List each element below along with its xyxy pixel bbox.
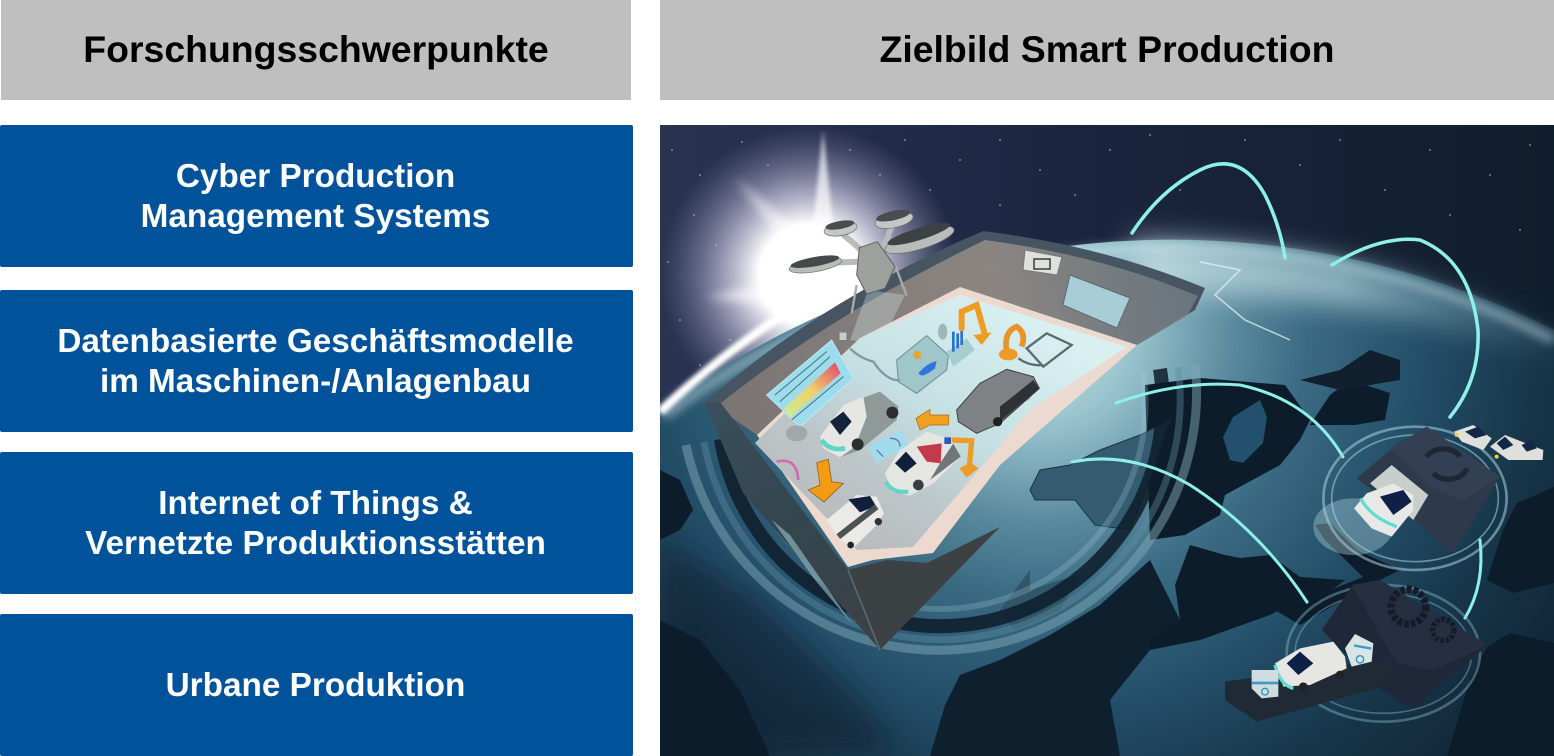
arms (817, 222, 913, 263)
legs (852, 265, 907, 313)
heading: Forschungsschwerpunkte: Forschungsschwerpunkte (83, 28, 549, 70)
panel: Internet of Things: Vernetzte Produktionsstätten (85, 525, 546, 562)
arc 3 (1465, 540, 1481, 618)
panel: Datenbasierte Geschäftsmodelle: Datenbasierte Geschäftsmodelle (57, 323, 574, 360)
rotor back left (823, 218, 858, 238)
car centre with robot (885, 432, 961, 496)
front edge (848, 570, 880, 650)
panel: Urbane Produktion: Urbane Produktion (166, 667, 465, 704)
body (857, 242, 895, 294)
arc 2 (1332, 239, 1478, 417)
robot arm front (944, 437, 979, 477)
panel: Urbane Produktion (0, 614, 633, 756)
panel: Cyber Production Management Systems (0, 125, 633, 267)
factory (702, 231, 1205, 650)
arc 5 (1072, 459, 1307, 602)
car left (820, 392, 898, 457)
orange robot arm right (999, 327, 1023, 360)
car front (827, 495, 884, 548)
front wall glass pane (772, 520, 853, 625)
production sites (1225, 425, 1543, 722)
drone light cone (850, 290, 905, 345)
land: blue Baltic inlet (1223, 400, 1267, 463)
floor (755, 295, 1127, 550)
parcel at gate (1345, 634, 1373, 667)
orange arrow lower (808, 459, 843, 502)
outer wall rim (702, 231, 1205, 435)
factory floor objects front (777, 369, 1039, 548)
rotor front left (788, 252, 843, 276)
rings: site 2 (1287, 585, 1480, 722)
conveyor (1225, 660, 1397, 722)
land: Iberia and Mediterranean (1150, 545, 1345, 650)
front left wall (705, 402, 880, 650)
panel: Internet of Things: Internet of Things & (158, 485, 473, 522)
status screen (767, 340, 853, 427)
stars (667, 134, 1531, 366)
inner back wall (716, 240, 1198, 435)
box with recycling icon (1357, 427, 1500, 553)
pink sketch wheel (777, 461, 798, 480)
shading lower left (660, 540, 900, 756)
finished cars (1454, 425, 1543, 460)
illustration: Zielbild Smart Production (660, 125, 1554, 756)
glass bench with blue tools (938, 324, 975, 367)
concentric rings around the factory (686, 364, 1197, 650)
data arcs (1072, 164, 1481, 618)
land: blue Arabia piece (1000, 570, 1080, 630)
panel: Cyber Production Management Systems: Management Systems (141, 198, 490, 235)
continents (660, 262, 1554, 756)
connecting tube (850, 348, 900, 380)
globe (660, 240, 1554, 756)
land: bottom right (1447, 633, 1554, 756)
panel: Datenbasierte Geschäftsmodelle: im Maschinen-/Anlagenbau (100, 363, 531, 400)
panel: Cyber Production Management Systems: Cyber Production (176, 158, 455, 195)
floor margin (757, 287, 1137, 567)
land: upper right Europe north (1145, 378, 1310, 540)
factory objects back area (839, 305, 1072, 401)
car on conveyor (1275, 642, 1347, 691)
3D printer (897, 336, 948, 393)
arc 4 (1116, 384, 1343, 457)
wireframe car (957, 369, 1039, 433)
land: left edge (660, 470, 693, 540)
front right wall (848, 527, 1000, 650)
land: mid blue Africa (1030, 420, 1170, 530)
land: far upper right (1300, 350, 1400, 390)
background: starry sky (660, 125, 1554, 756)
heading: Zielbild Smart Production: Zielbild Smart Production (880, 28, 1334, 70)
window (1063, 275, 1130, 328)
land: pale coastline upper right (1200, 262, 1290, 340)
land: Scandinavia (1310, 380, 1390, 425)
rotor back right (873, 207, 915, 231)
arc 1 (1132, 164, 1285, 258)
land: bottom centre (930, 560, 1180, 756)
land: bottom left (660, 620, 770, 756)
person with tablet (1018, 376, 1032, 401)
light pool under site 1 (1313, 498, 1393, 555)
wall board (1023, 250, 1062, 275)
heading: Forschungsschwerpunkte (1, 0, 631, 100)
sun flare behind the globe (660, 125, 960, 425)
grey figure (786, 425, 807, 441)
rotor front right (882, 218, 957, 259)
land: Balkan (1270, 523, 1400, 625)
panel: Internet of Things (0, 452, 633, 594)
pale region upper right (1130, 240, 1554, 355)
wall socket (839, 332, 847, 340)
bright limb at the sunrise (660, 285, 830, 412)
panel: Datenbasierte Geschäftsmodelle (0, 290, 633, 432)
orange arrow upper (916, 409, 949, 430)
atmosphere glow along the limb (664, 248, 1554, 416)
car leaving box (1354, 483, 1413, 537)
orange robot arm back (962, 305, 992, 345)
parcel on conveyor (1252, 670, 1278, 698)
chassis frame (1018, 333, 1072, 367)
rings: site 1 (1323, 427, 1507, 570)
drone (788, 207, 957, 313)
land: right shore (1487, 487, 1554, 593)
box with gear icon (1322, 580, 1488, 708)
diagram tablet (868, 430, 908, 463)
heading: Zielbild Smart Production (660, 0, 1554, 100)
